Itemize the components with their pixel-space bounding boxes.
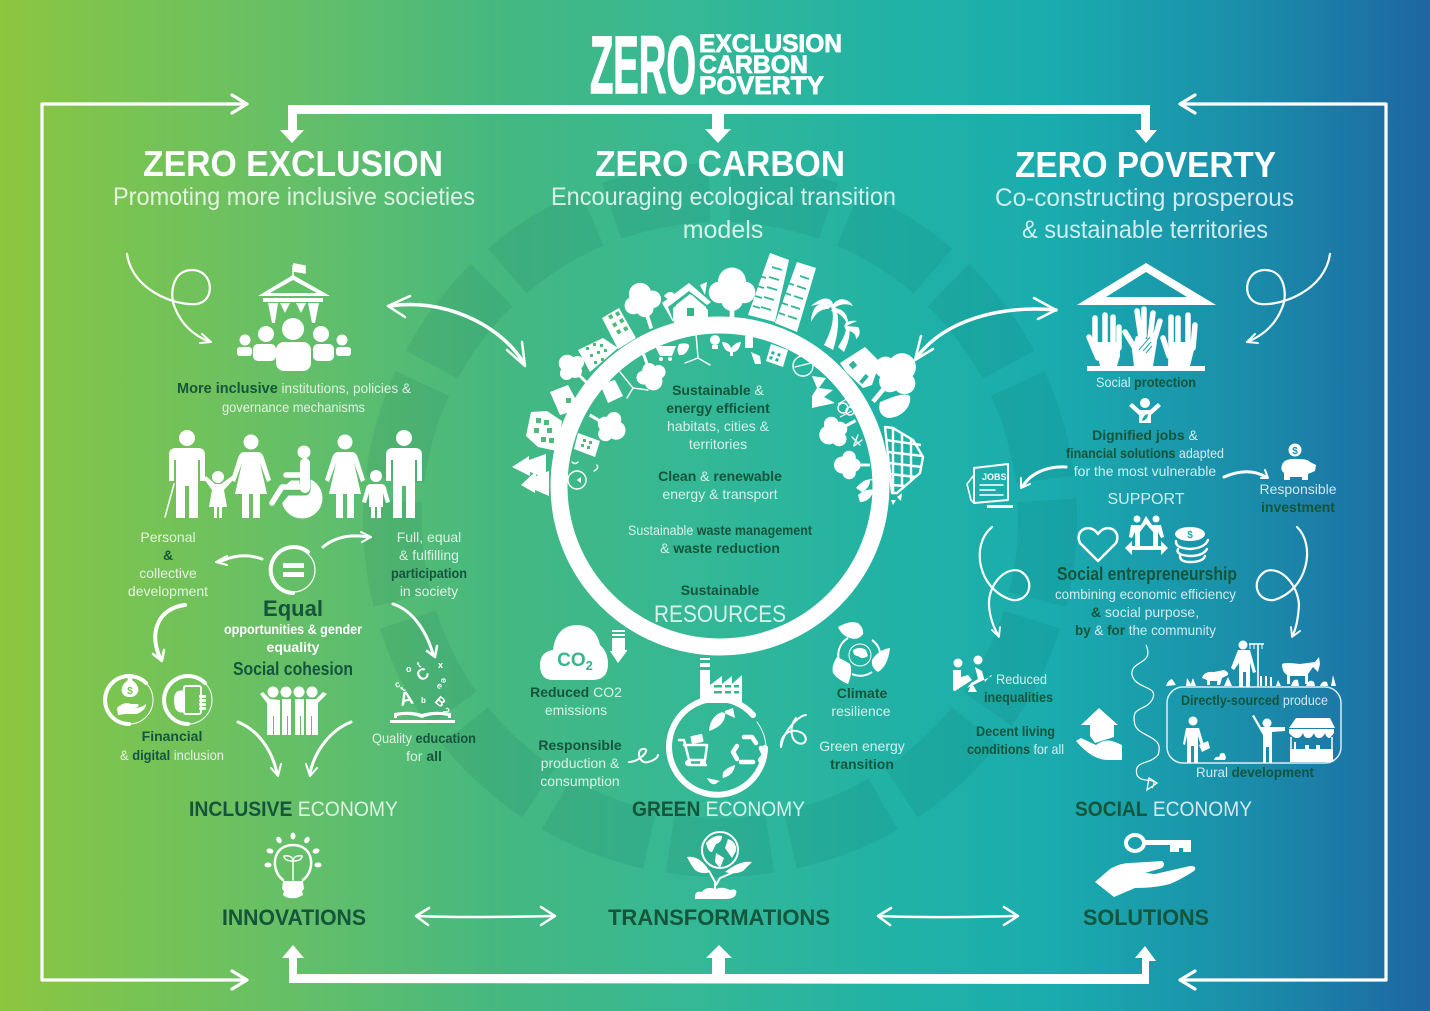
text: dignified jobs: for the most vulnerable <box>1074 463 1216 479</box>
icon: CO2 cloud: CO <box>557 650 586 671</box>
heading: green economy: GREEN ECONOMY <box>632 798 805 821</box>
text: sustainable habitats: energy efficient <box>666 400 770 416</box>
house right <box>840 347 880 388</box>
text: financial and digital inclusion: & digital inclusion <box>120 747 224 763</box>
icon: book and letters: t <box>398 685 407 693</box>
icon: green factory globe <box>669 658 766 795</box>
column heading: zero poverty: & sustainable territories <box>1022 216 1268 244</box>
text: decent living conditions: conditions for all <box>967 741 1064 757</box>
text: more inclusive institutions: governance mechanisms <box>222 399 365 415</box>
text: directly-sourced produce: Directly-sourced produce <box>1181 692 1328 708</box>
text: equal opportunities and social cohesion: opportunities & gender <box>224 621 362 637</box>
icon: shopper <box>1183 716 1226 763</box>
text: green energy transition: Green energy <box>819 738 905 754</box>
text: sustainable habitats <box>666 382 770 452</box>
house top <box>662 282 711 330</box>
text: responsible production: consumption <box>540 773 620 789</box>
arrow: to jobs <box>1021 467 1066 488</box>
text: responsible investment: investment <box>1261 499 1335 515</box>
text: reduced CO2: Reduced CO2 <box>530 684 622 700</box>
text: clean and renewable <box>658 468 782 502</box>
icon: jobs newspaper <box>967 464 1013 508</box>
trees on ring <box>709 268 755 326</box>
arrow: curly right support <box>1257 527 1307 637</box>
text: reduced CO2 <box>530 684 622 718</box>
column heading: zero exclusion <box>113 143 475 211</box>
text: climate resilience <box>831 685 891 719</box>
text: dignified jobs: Dignified jobs & <box>1092 427 1199 443</box>
title logo: EXCLUSION <box>699 30 842 58</box>
ring inner icons <box>568 334 874 489</box>
double arrow: exclusion to carbon <box>388 296 525 366</box>
text: personal and collective development: collective <box>139 565 197 581</box>
icon: key and hand <box>1095 835 1195 897</box>
column heading: zero carbon <box>551 143 896 244</box>
icon: equal sign <box>271 547 315 593</box>
text: climate resilience: resilience <box>831 703 891 719</box>
text: green energy transition <box>819 738 905 772</box>
icon: CO2 cloud: 2 <box>586 658 593 673</box>
text: personal and collective development: & <box>163 547 173 563</box>
icon: book and letters: x <box>438 660 443 670</box>
icon: globe and plant <box>687 832 752 899</box>
pine trees left <box>512 454 549 496</box>
text: rural development: Rural development <box>1196 764 1314 780</box>
icon: financial inclusion: $ <box>127 686 133 697</box>
icon: person with leaf <box>1129 398 1161 423</box>
text: waste <box>628 522 812 556</box>
icon: book and letters: e <box>435 680 444 691</box>
palm trees <box>811 298 860 352</box>
text: waste: Sustainable waste management <box>628 522 812 538</box>
solar building right <box>885 427 923 493</box>
text: dignified jobs: financial solutions adapted <box>1066 445 1224 461</box>
buildings left <box>512 308 636 496</box>
text: reduced inequalities: inequalities <box>984 689 1053 705</box>
icon: linked people <box>260 686 327 735</box>
icon: seesaw <box>953 656 992 692</box>
icon: book and letters: 2 <box>440 706 452 718</box>
arrow: curly left support <box>980 527 1029 637</box>
icon: house in hand <box>1076 708 1122 760</box>
background ring segments <box>346 146 1094 894</box>
icon: book and letters: e <box>439 678 449 683</box>
text: responsible investment: Responsible <box>1259 481 1337 497</box>
icon: institution and people <box>237 264 351 371</box>
icon: book and letters <box>390 660 455 723</box>
planet ring with city <box>512 253 929 647</box>
text: social entrepreneurship: combining economic efficiency <box>1055 586 1236 602</box>
text: dignified jobs <box>1066 427 1224 479</box>
text: personal and collective development <box>128 529 208 599</box>
column heading: zero carbon: models <box>683 216 763 244</box>
heading: social economy: SOCIAL ECONOMY <box>1075 798 1252 821</box>
heading: transformations: TRANSFORMATIONS <box>608 905 830 930</box>
text: responsible production: Responsible <box>538 737 622 753</box>
double arrow: carbon to poverty <box>915 298 1056 360</box>
text: full participation <box>391 529 467 599</box>
text: social entrepreneurship: & social purpose, <box>1091 604 1199 620</box>
arrow: right curl <box>1247 254 1330 343</box>
text: full participation: participation <box>391 565 467 581</box>
arrow: left curl <box>127 254 211 343</box>
icon: book and letters: t <box>415 660 423 670</box>
text: financial and digital inclusion: Financial <box>142 728 202 744</box>
top distribution arrows <box>280 105 1157 143</box>
icon: heart <box>1079 528 1117 561</box>
column heading: zero carbon: ZERO CARBON <box>595 143 845 184</box>
frame arrow: right bracket <box>1180 95 1386 989</box>
text: financial and digital inclusion <box>120 728 224 763</box>
column heading: zero carbon: Encouraging ecological transition <box>551 183 896 211</box>
heading: inclusive economy: INCLUSIVE ECONOMY <box>189 798 398 821</box>
double arrow: innovations to transformations <box>416 907 555 925</box>
text: responsible production: production & <box>541 755 620 771</box>
column heading: zero poverty: Co-constructing prosperous <box>995 184 1294 212</box>
icon: family group <box>165 430 422 518</box>
icon: piggy bank: $ <box>1292 446 1298 457</box>
icon: social protection house and hands <box>1077 263 1216 371</box>
arrow: small curl right <box>781 715 806 747</box>
icon: two people high five <box>1125 516 1168 555</box>
column heading: zero exclusion: ZERO EXCLUSION <box>143 143 443 184</box>
column heading: zero exclusion: Promoting more inclusive societies <box>113 183 475 211</box>
text: climate resilience: Climate <box>837 685 887 701</box>
text: equal opportunities and social cohesion: Equal <box>263 596 323 621</box>
text: reduced CO2: emissions <box>545 702 607 718</box>
text: full participation: & fulfilling <box>399 547 459 563</box>
heading: solutions: SOLUTIONS <box>1083 905 1209 930</box>
icon: coins <box>1175 527 1208 562</box>
icon: piggy bank <box>1281 444 1316 480</box>
arrow: to investment <box>1224 470 1268 478</box>
text: responsible investment <box>1259 481 1337 515</box>
text: sustainable resources: Sustainable <box>681 582 759 598</box>
icon: book and letters: c <box>393 679 401 690</box>
text: equal opportunities and social cohesion: Social cohesion <box>233 659 353 679</box>
skyscrapers <box>748 253 816 332</box>
icon: farm strip <box>1166 640 1336 687</box>
title logo: ZERO <box>590 20 696 111</box>
text: social entrepreneurship: by & for the community <box>1075 622 1216 638</box>
icon: climate leaves <box>832 622 890 684</box>
text: more inclusive institutions <box>177 380 412 415</box>
title logo: POVERTY <box>699 72 824 100</box>
text: decent living conditions <box>967 723 1064 757</box>
text: social entrepreneurship <box>1055 564 1237 638</box>
blob tree right <box>879 395 910 418</box>
icon: digital inclusion <box>164 676 212 724</box>
text: quality education <box>372 730 476 764</box>
text: equal opportunities and social cohesion <box>224 596 362 679</box>
text: social entrepreneurship: Social entrepreneurship <box>1057 564 1237 584</box>
arrow: wavy down <box>1132 645 1159 790</box>
text: sustainable resources: RESOURCES <box>654 601 786 628</box>
text: waste: & waste reduction <box>660 540 780 556</box>
panel: rural produce <box>1167 687 1341 763</box>
text: full participation: Full, equal <box>397 529 461 545</box>
frame arrow: left bracket <box>42 95 247 989</box>
text: reduced inequalities: Reduced <box>996 671 1047 687</box>
icon: book and letters: o <box>406 664 412 674</box>
text: quality education: Quality education <box>372 730 476 746</box>
icon: coins: $ <box>1187 530 1193 541</box>
heading: innovations: INNOVATIONS <box>222 905 366 930</box>
bottom convergence arrows <box>282 945 1156 984</box>
text: decent living conditions: Decent living <box>976 723 1055 739</box>
text: quality education: for all <box>406 748 442 764</box>
text: social protection: Social protection <box>1096 374 1196 390</box>
icon: financial inclusion <box>105 675 153 724</box>
column heading: zero poverty <box>995 144 1294 244</box>
text: clean and renewable: Clean & renewable <box>658 468 782 484</box>
icon: jobs newspaper: JOBS <box>982 472 1007 482</box>
text: equal opportunities and social cohesion: equality <box>267 639 320 655</box>
arrow: small curl left <box>629 749 658 762</box>
column heading: zero poverty: ZERO POVERTY <box>1015 144 1276 185</box>
icon: book and letters: A <box>398 687 416 711</box>
text: full participation: in society <box>400 583 458 599</box>
text: sustainable habitats: Sustainable & <box>672 382 765 398</box>
icon: book and letters: B <box>432 693 449 710</box>
text: personal and collective development: development <box>128 583 208 599</box>
text: more inclusive institutions: More inclusive institutions, policies & <box>177 380 412 397</box>
text: responsible production <box>538 737 622 789</box>
text: support: SUPPORT <box>1107 491 1185 508</box>
icon: CO2 cloud <box>540 625 627 680</box>
text: sustainable habitats: habitats, cities & <box>667 418 770 434</box>
icon: innovation light bulb <box>264 832 322 898</box>
icon: book and letters: b <box>421 696 426 705</box>
text: green energy transition: transition <box>830 756 894 772</box>
arrows: inclusive flows <box>153 532 437 776</box>
text: sustainable habitats: territories <box>689 436 747 452</box>
text: personal and collective development: Personal <box>140 529 196 545</box>
text: clean and renewable: energy & transport <box>662 486 778 502</box>
text: reduced inequalities <box>984 671 1053 705</box>
title logo: CARBON <box>699 51 808 79</box>
double arrow: transformations to solutions <box>878 907 1018 925</box>
icon: market stall <box>1252 715 1335 763</box>
icon: book and letters: C <box>414 664 433 685</box>
text: sustainable resources <box>654 582 786 628</box>
